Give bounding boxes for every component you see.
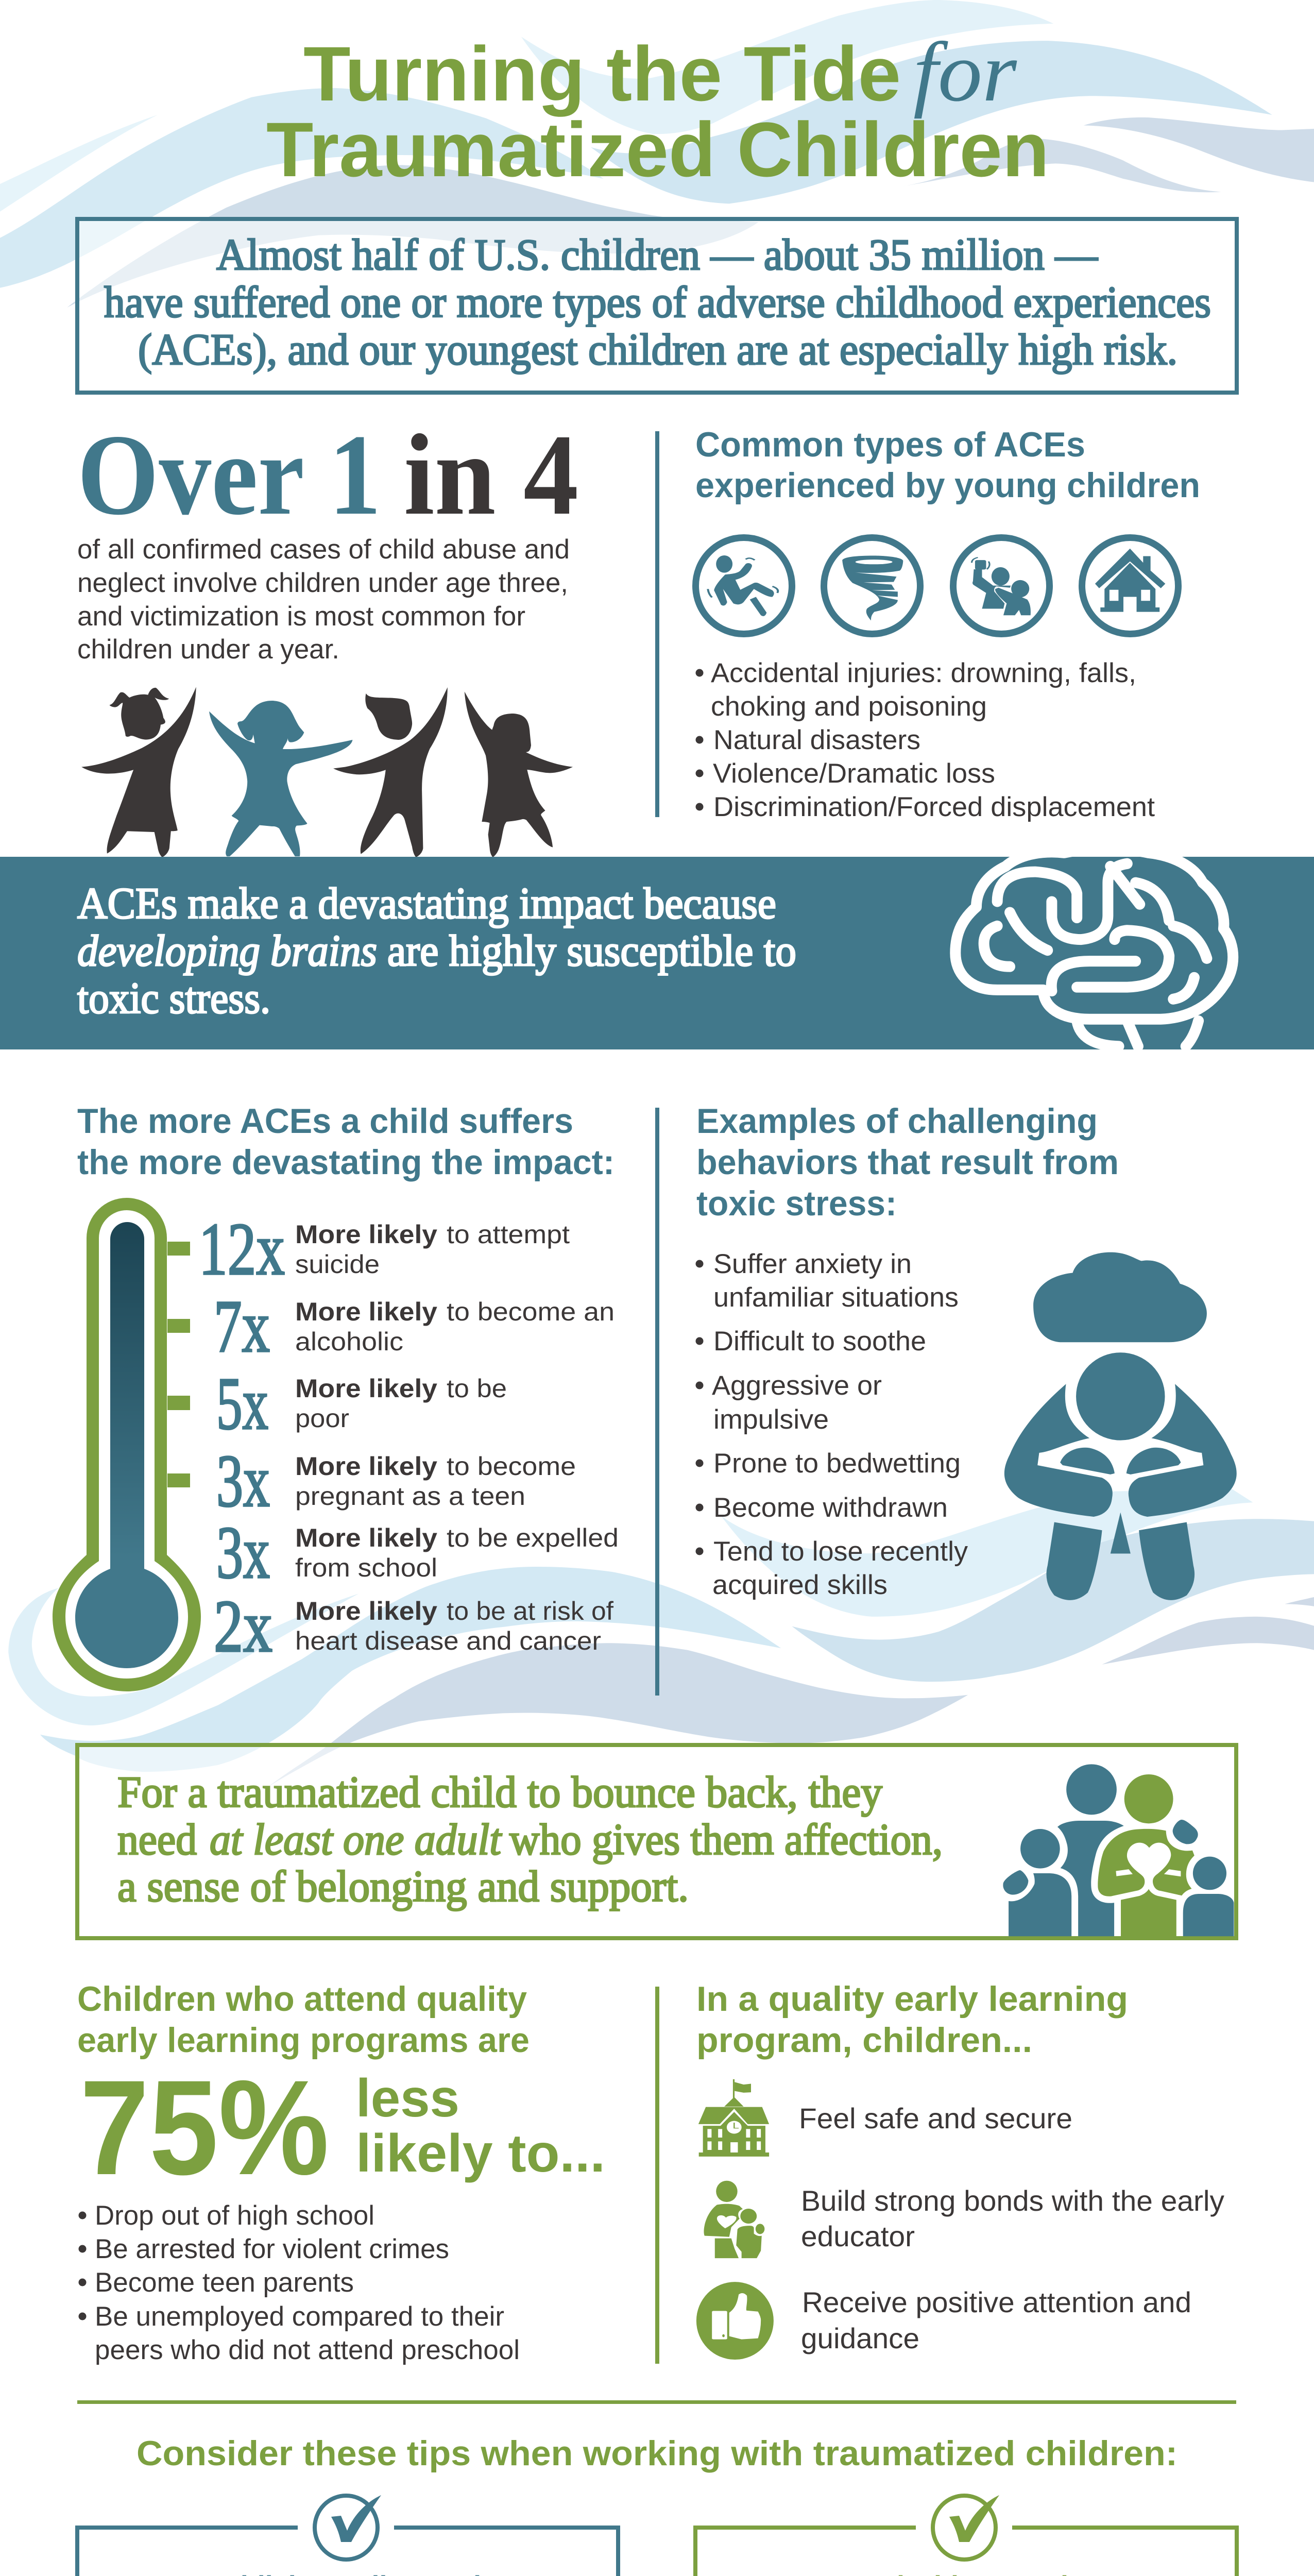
callout: at least one adult: at least one adult [210,1815,502,1864]
heading: quality program [696,1979,1128,2060]
list: outcomes avoided [78,2200,520,2365]
list: outcomes avoided: Be arrested for violent crimes [95,2234,449,2264]
title [266,25,1049,193]
list: behaviors: Suffer anxiety in [713,1249,912,1279]
stats: multipliers: 3x [216,1512,270,1594]
labels: likelihood outcomes: More likely [295,1220,437,1249]
text: stat description: neglect involve children under age three, [77,568,568,598]
title: Traumatized Children [266,106,1049,193]
background waves: top [0,0,1314,308]
stat: over 1 in 4 [77,410,578,539]
callout: at least one adult [77,1745,1236,1938]
labels: likelihood outcomes: to attempt [447,1220,570,1249]
labels: likelihood outcomes: to become an [447,1297,615,1326]
callout: half of U.S. children: Almost half of U.S. children — about 35 million — [216,230,1098,279]
list: ACE types: choking and poisoning [711,691,987,722]
band: toxic stress: developing brains [77,926,377,975]
stat: 75 percent less likely: less [356,2069,459,2128]
list: behaviors: impulsive [713,1404,829,1435]
heading: early learning programs: early learning programs are [77,2021,530,2060]
list: outcomes avoided: peers who did not attend preschool [95,2335,520,2365]
labels: likelihood outcomes: to be expelled [447,1523,619,1552]
heading: early learning programs [77,1979,530,2060]
stat: 75 percent less likely: 75% [80,2052,329,2203]
background waves: middle [8,1489,1314,1787]
list: behaviors: acquired skills [712,1570,888,1600]
icon: house [1095,549,1165,612]
heading: common types of ACEs [695,425,1200,505]
heading: early learning programs: Children who attend quality [77,1979,527,2019]
text: positive attention: guidance [801,2322,919,2354]
callout: at least one adult: a sense of belonging and support. [117,1861,689,1911]
labels: likelihood outcomes [295,1220,619,1655]
text: build strong bonds: educator [801,2220,915,2252]
list: behaviors: unfamiliar situations [713,1282,959,1313]
icon: violence [972,557,1031,615]
stats: multipliers: 2x [214,1585,272,1668]
icon: child under a cloud [1004,1252,1237,1600]
band: toxic stress: ACEs make a devastating impact because [77,878,776,928]
stats: multipliers: 12x [199,1208,285,1291]
heading: quality program: program, children... [696,2021,1032,2060]
heading: challenging behaviors: Examples of challenging [696,1101,1098,1141]
list: behaviors: Prone to bedwetting [713,1448,961,1479]
list: behaviors: Become withdrawn [713,1493,948,1523]
labels: likelihood outcomes: More likely [295,1452,437,1481]
labels: likelihood outcomes: to be at risk of [447,1597,613,1625]
icon: family [1003,1764,1234,1936]
callout: at least one adult: need [117,1815,197,1864]
list: ACE types: Natural disasters [713,725,920,755]
heading: common types of ACEs: experienced by young children [695,466,1200,505]
labels: likelihood outcomes: from school [295,1553,437,1582]
labels: likelihood outcomes: to become [447,1452,576,1481]
labels: likelihood outcomes: More likely [295,1374,437,1403]
list: outcomes avoided: Be unemployed compared to their [95,2301,504,2332]
panel: tip lead with empathy [695,2495,1237,2576]
panel: tip establish a daily routine [77,2495,618,2576]
heading: common types of ACEs: Common types of ACEs [695,425,1085,464]
text: stat description: and victimization is most common for [77,601,525,632]
text: build strong bonds [801,2184,1224,2252]
heading: challenging behaviors: toxic stress: [696,1184,897,1223]
stat: 75 percent less likely: likely to... [356,2124,605,2183]
labels: likelihood outcomes: More likely [295,1523,437,1552]
title: for [913,25,1017,119]
labels: likelihood outcomes: More likely [295,1597,437,1625]
band: toxic stress [0,849,1314,1049]
icon: school [698,2079,769,2157]
stat: over 1 in 4: in 4 [404,410,578,539]
band: toxic stress: are highly susceptible to [387,926,796,975]
list: behaviors: Aggressive or [712,1370,882,1401]
stats: multipliers: 7x [214,1285,270,1368]
text: stat description: of all confirmed cases of child abuse and [77,534,570,565]
labels: likelihood outcomes: pregnant as a teen [295,1482,525,1511]
callout: at least one adult: who gives them affection, [509,1815,943,1864]
text: positive attention [801,2286,1191,2354]
callout: half of U.S. children: (ACEs), and our youngest children are at especially high risk. [138,325,1178,374]
labels: likelihood outcomes: to be [447,1374,507,1403]
text: feel safe: Feel safe and secure [799,2102,1072,2134]
stat: 75 percent less likely [80,2052,605,2203]
heading: more ACEs [77,1101,615,1182]
stats: multipliers [199,1208,285,1668]
list: behaviors: Difficult to soothe [713,1326,926,1357]
band: toxic stress: toxic stress. [77,973,270,1023]
stats: multipliers: 3x [216,1440,270,1522]
list: outcomes avoided: Drop out of high school [95,2200,374,2231]
icon: tornado [842,555,903,620]
labels: likelihood outcomes: heart disease and cancer [295,1626,601,1655]
icon: thumbs up [696,2282,774,2360]
icon: brain [955,849,1233,1046]
labels: likelihood outcomes: poor [295,1404,349,1433]
text: build strong bonds: Build strong bonds with the early [801,2184,1224,2217]
heading: more ACEs: the more devastating the impact: [77,1143,615,1182]
list: outcomes avoided: Become teen parents [95,2267,354,2298]
chart: thermometer [53,1198,201,1691]
heading: challenging behaviors: behaviors that result from [696,1143,1119,1182]
labels: likelihood outcomes: More likely [295,1297,437,1326]
list: ACE types: Discrimination/Forced displacement [713,792,1155,822]
text: stat description [77,534,570,665]
heading: more ACEs: The more ACEs a child suffers [77,1101,573,1141]
icon: educator and child [704,2181,764,2258]
heading: quality program: In a quality early learning [696,1979,1128,2019]
list: behaviors [695,1249,968,1600]
icon: falling child [708,555,778,616]
heading: tips: Consider these tips when working with traumatized children: [136,2434,1178,2473]
list: behaviors: Tend to lose recently [713,1536,968,1567]
text: positive attention: Receive positive attention and [802,2286,1191,2318]
callout: half of U.S. children [77,219,1237,393]
heading: challenging behaviors [696,1101,1119,1223]
text: stat description: children under a year. [77,634,339,665]
callout: at least one adult: For a traumatized child to bounce back, they [117,1767,882,1817]
labels: likelihood outcomes: alcoholic [295,1327,403,1356]
title: Turning the Tide [303,30,901,117]
stat: over 1 in 4: Over 1 [77,410,381,539]
icons: ACE types [695,538,1179,634]
icon: four children silhouettes [81,687,573,857]
labels: likelihood outcomes: suicide [295,1250,380,1279]
list: ACE types: Accidental injuries: drowning, falls, [711,658,1136,688]
callout: half of U.S. children: have suffered one or more types of adverse childhood experiences [104,277,1211,327]
list: ACE types [695,658,1155,822]
list: ACE types: Violence/Dramatic loss [713,758,995,789]
stats: multipliers: 5x [216,1363,268,1445]
